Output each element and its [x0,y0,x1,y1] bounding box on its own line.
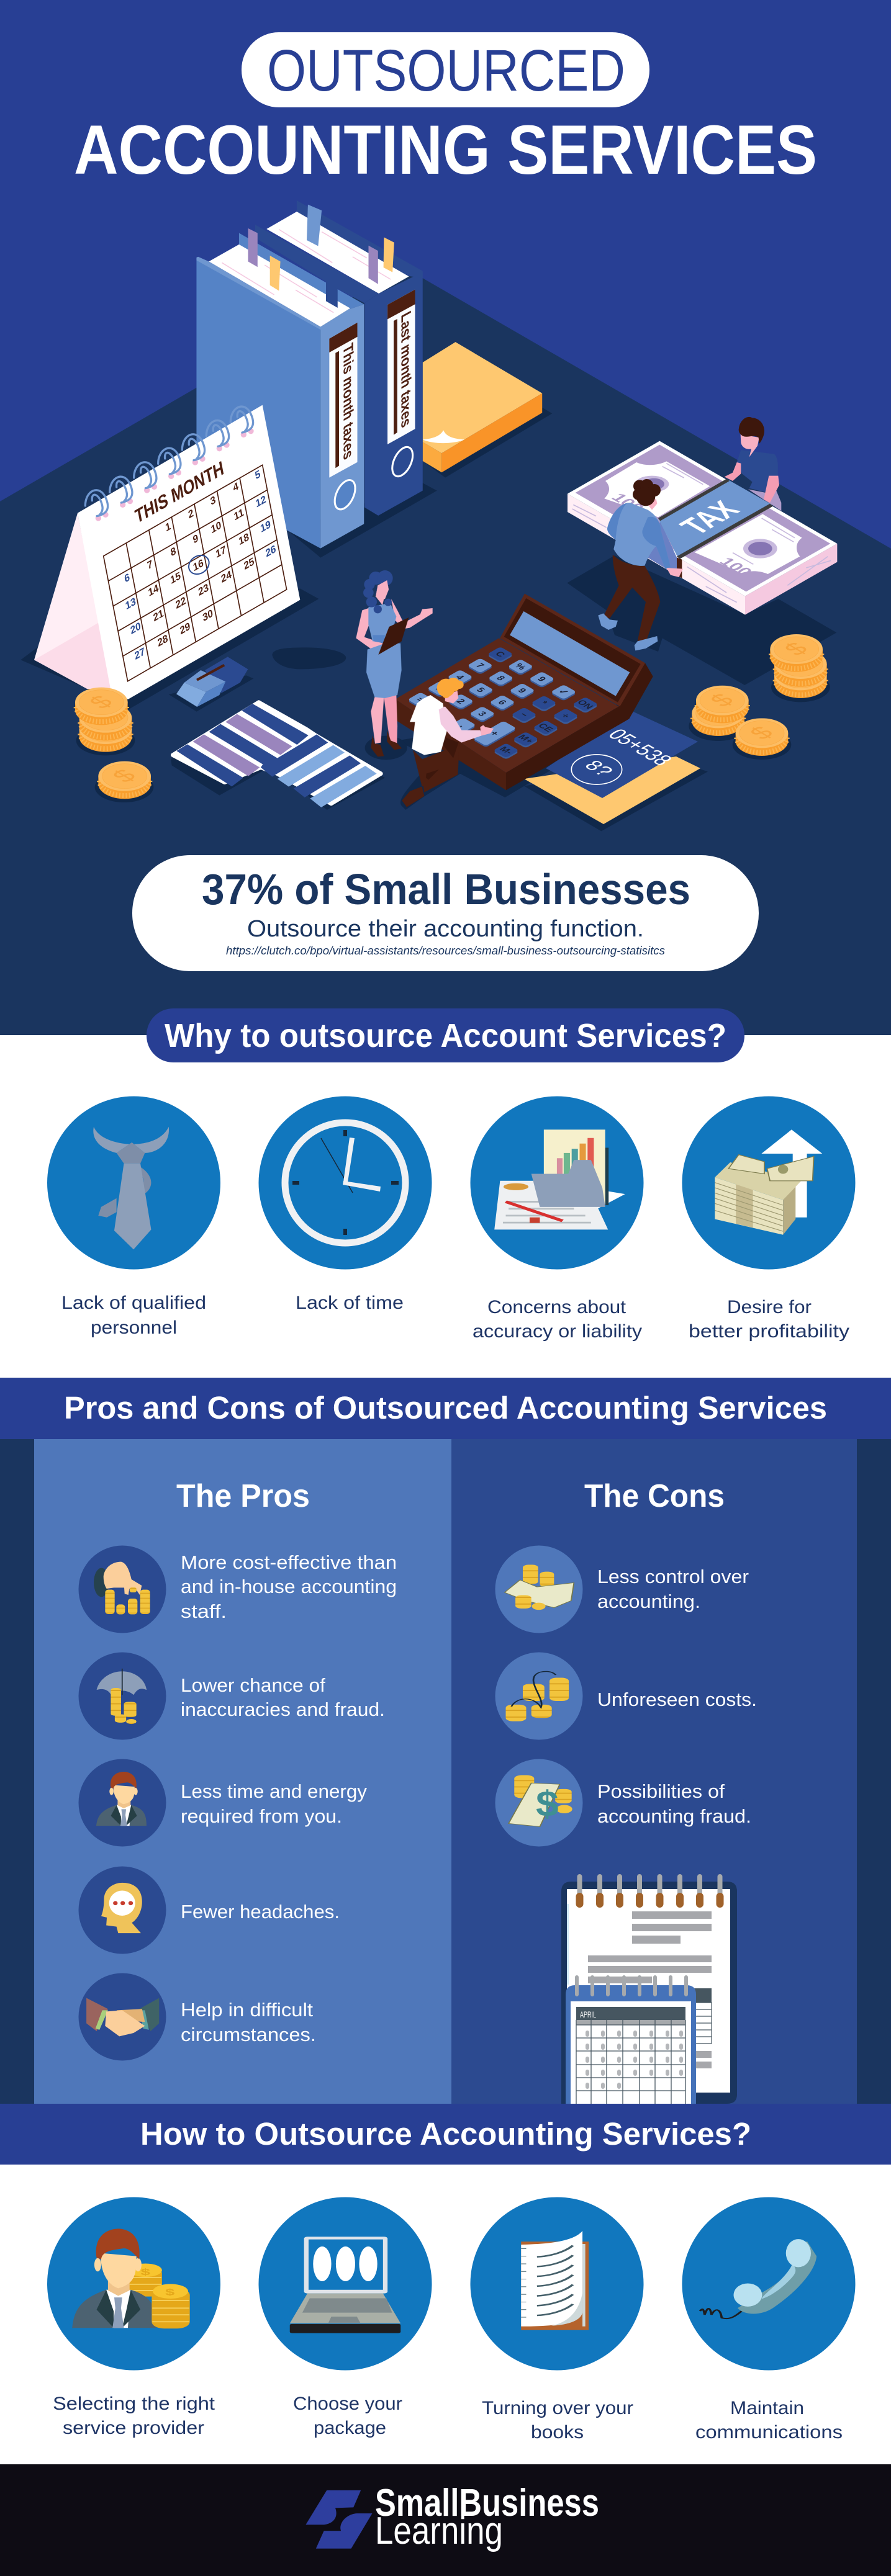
icon: money and coins: $ [536,1784,559,1824]
step: maintain communications: Maintain [730,2398,804,2418]
icon: handshake [86,1998,159,2036]
icon: lone coin right [733,718,791,760]
icon: stack of 100 notes: 100 [715,555,757,578]
white page background [0,1035,891,2464]
calculator keys: C [492,650,507,658]
step: selecting provider: Selecting the right [53,2394,215,2414]
reason: lack of qualified personnel: personnel [91,1317,177,1338]
step: turning over books: books [531,2422,584,2443]
calculator keys: % [512,662,528,671]
calendar dates: 6 [124,571,130,585]
reason: lack of time [258,1096,432,1313]
paper under calculator: 8? [580,757,618,779]
icon: colour tabs [171,702,385,810]
icon: coins and banknotes [505,1564,574,1610]
calendar dates: 12 [255,493,267,510]
calculator keys: 2 [454,698,467,706]
reason: desire for profitability [682,1096,856,1342]
background: isometric navy floor [0,267,891,1035]
step: turning over books [471,2197,643,2443]
calendar dates: 29 [179,620,191,637]
icon: eraser [169,657,253,712]
calendar dates: 8 [170,544,177,559]
calendar dates: 7 [146,557,153,572]
calculator keys [408,647,598,758]
calendar dates: 5 [254,467,261,482]
step: choose package: package [314,2418,386,2438]
pro: help in difficult circumstances: Help in difficult [181,1999,313,2021]
calculator keys: 4 [453,673,466,681]
calculator keys: = [414,696,427,704]
calculator keys: * [538,700,550,707]
small calendar: APRIL [580,2009,596,2019]
calculator keys: 9 [515,687,528,694]
logo wordmark [375,2482,599,2552]
calendar dates: 26 [265,542,277,560]
calendar heading: THIS MONTH [133,457,225,528]
binder: last month taxes: Last month taxes [398,308,414,431]
calendar dates: 16 [192,557,204,574]
calendar grid [104,465,287,681]
icon: coin stack centre [689,686,749,741]
step: maintain communications [682,2197,856,2443]
section band: pros and cons [0,1378,891,1439]
calculator keys: . [457,722,468,729]
icon: money and coins [509,1775,572,1826]
calculator keys: + [487,730,500,737]
panel: the cons: The Cons [584,1478,725,1514]
icon: stack of 100 notes [568,441,837,615]
icon: coin stack right: $ [779,639,814,659]
step: maintain communications: communications [695,2422,843,2443]
paper under calculator [524,711,708,831]
step: selecting provider: service provider [63,2418,204,2438]
calculator keys: 8 [494,675,507,682]
icon: head [101,1883,142,1933]
con: possibilities of fraud: Possibilities of [597,1780,725,1802]
step: selecting provider [47,2197,220,2438]
pro: cost-effective: More cost-effective than [181,1551,397,1573]
con: possibilities of fraud [495,1759,751,1847]
header background [0,0,891,1035]
icon: businessman with coins [72,2228,190,2328]
calendar dates: 1 [165,519,171,534]
icon: businessman with coins: $ [165,2287,174,2297]
paper under calculator: 05+538 [602,726,677,769]
step: turning over books: Turning over your [482,2398,633,2418]
calendar dates: 27 [133,645,146,662]
calendar dates: 19 [260,518,271,535]
icon: coin stack left: $ [83,692,119,712]
con: unforeseen costs [495,1652,757,1740]
binder: this month taxes [196,228,364,549]
binder: this month taxes: This month taxes [340,340,356,463]
icon: sticky note pad [423,342,552,478]
con: less control: accounting. [597,1591,700,1612]
calendar dates: 20 [129,619,142,637]
icon: businessman with coins: $ [141,2267,150,2278]
icon: telephone handset [700,2239,816,2318]
calculator keys: CE [535,722,555,734]
calendar dates: 25 [243,555,255,572]
step: choose package [258,2197,432,2438]
con: unforeseen costs: Unforeseen costs. [597,1689,757,1710]
reason: lack of time: Lack of time [296,1293,404,1313]
panel: the cons [451,1439,857,2104]
calendar dates: 17 [215,543,227,560]
pro: cost-effective: staff. [181,1600,227,1622]
section band: how to outsource [0,2104,891,2165]
icon: hand and coins [94,1562,150,1614]
calculator keys: ÷ [559,712,572,720]
pro: fewer headaches: Fewer headaches. [181,1901,340,1923]
reason: concerns about accuracy [471,1096,643,1342]
calendar dates: 15 [170,569,181,586]
illustration: calculator and paper [356,570,708,831]
calendar dates: 22 [174,594,187,611]
con: less control [495,1545,749,1633]
binder: last month taxes [255,200,423,516]
calendar dates: 2 [187,506,194,521]
icon: coin stack right [770,634,830,702]
floor shadow [272,647,346,669]
calculator keys: M- [497,745,515,756]
icon: single coin [95,761,153,802]
pro: fewer headaches [78,1867,340,1954]
calculator keys: 5 [474,686,487,694]
small calendar [566,1977,696,2104]
calendar dates: 18 [238,531,250,548]
callout: 37% statistic: Outsource their accounting function. [247,916,644,942]
pro: less time and energy [78,1759,367,1847]
icon: laptop [290,2237,400,2333]
icon: logo mark [305,2490,372,2549]
person: man pressing key [400,678,494,810]
calendar dates: 21 [152,607,165,624]
icon: coin stack centre: $ [704,690,740,711]
reason: desire for profitability: better profitability [689,1321,849,1342]
icon: coin stack left [75,688,135,755]
reason: concerns about accuracy: accuracy or liability [473,1321,642,1342]
calendar page [78,405,300,701]
calendar dates: 11 [233,506,245,523]
icon: single coin: $ [107,766,142,786]
icon: stack of 100 notes: 100 [607,491,649,514]
calculator keys: 7 [473,662,486,670]
title pill [242,32,649,107]
pro: help in difficult circumstances [78,1973,316,2060]
tax band: TAX [672,496,748,539]
calendar dates: 13 [124,595,137,613]
reason: desire for profitability: Desire for [727,1297,812,1317]
icon: necktie [93,1127,169,1249]
logo wordmark: Learning [375,2510,503,2552]
date circle [185,552,213,578]
panel: the pros [34,1439,451,2104]
calendar stand [34,513,112,689]
calculator keys: 6 [495,699,509,706]
con: possibilities of fraud: accounting fraud. [597,1805,751,1827]
icon: businessman [96,1772,147,1826]
calendar dates: 9 [192,532,199,546]
pro: cost-effective [78,1545,397,1633]
pro: cost-effective: and in-house accounting [181,1576,397,1597]
calendar dates: 4 [232,480,240,494]
icon: money stack with arrow [715,1129,822,1235]
icon: report and chart [494,1129,625,1229]
illustration: tax money and carriers [567,417,837,760]
calculator keys: ON [574,699,595,711]
tax band [646,479,773,578]
calendar dates [124,467,277,662]
calendar dates: 24 [220,568,233,585]
calculator keys: M+ [515,734,535,745]
pro: less time and energy: required from you. [181,1805,342,1827]
logo wordmark: SmallBusiness [375,2482,599,2524]
calculator body [396,594,653,790]
pro: lower chance of inaccuracies: Lower chance of [181,1674,325,1696]
panel: the pros: The Pros [176,1478,310,1514]
calendar dates: 10 [210,519,222,536]
calendar dates: 3 [209,493,217,508]
illustration: binders and sticky pad [196,200,552,558]
person: carrier behind [725,417,781,511]
callout: 37% statistic: https://clutch.co/bpo/virtual-assistants/resources/small-business-outsourcing-statisitcs [226,945,665,957]
icon: clock [285,1123,405,1243]
callout: 37% statistic: 37% of Small Businesses [202,865,690,913]
icon: lone coin right: $ [744,723,779,743]
pro: lower chance of inaccuracies [78,1652,385,1740]
title [74,32,817,189]
title line 1: OUTSOURCED [267,38,625,104]
calculator keys: − [517,711,530,719]
calendar dates: 28 [156,632,169,649]
calculator keys: 3 [475,710,488,718]
icon: umbrella and coins [97,1669,147,1724]
calculator keys: 1 [433,685,446,693]
calendar dates: 23 [197,581,209,598]
person: carrier in front [598,479,683,650]
calendar dates: 14 [147,581,160,599]
side margins [0,1439,891,2104]
pro: lower chance of inaccuracies: inaccuracies and fraud. [181,1699,385,1720]
illustration: desk calendar [20,405,346,709]
callout: 37% statistic [132,855,759,971]
step: choose package: Choose your [293,2394,402,2414]
footer [0,2464,891,2576]
reason: concerns about accuracy: Concerns about [487,1297,626,1317]
pro: help in difficult circumstances: circumstances. [181,2024,316,2045]
icon: ledger book [521,2231,589,2330]
icon: bouncing coins [506,1671,569,1721]
pro: less time and energy: Less time and energy [181,1780,367,1802]
calendar dates: 30 [202,607,214,624]
calculator keys: ✓ [556,688,571,697]
calculator keys: 9 [535,675,548,683]
calendar rings [85,406,254,521]
icon: notebook and calendar [561,1877,737,2104]
section band: pros and cons: Pros and Cons of Outsourced Accounting Services [64,1390,827,1425]
title line 2: ACCOUNTING SERVICES [74,111,817,189]
person: woman with clipboard [356,570,433,760]
reason: lack of qualified personnel: Lack of qualified [61,1293,206,1313]
heading: why to outsource [147,1008,744,1062]
heading: why to outsource: Why to outsource Account Services? [165,1017,726,1054]
reason: lack of qualified personnel [47,1096,220,1338]
illustration: coins, eraser and colour tabs [75,657,385,810]
section band: how to outsource: How to Outsource Accounting Services? [140,2116,751,2152]
con: less control: Less control over [597,1566,749,1587]
